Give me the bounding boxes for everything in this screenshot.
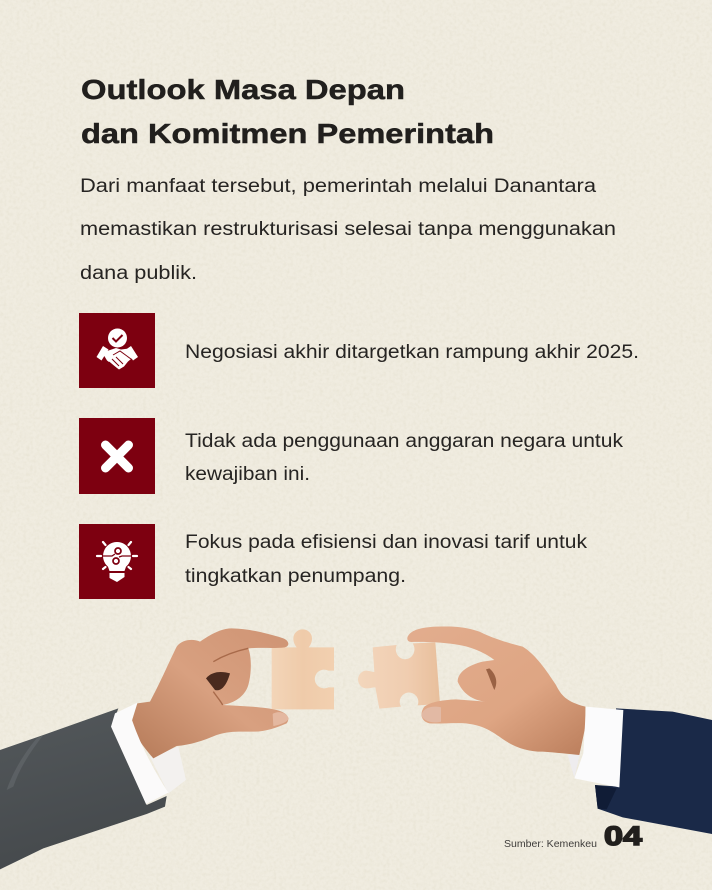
- title: dan Komitmen Pemerintah: [81, 118, 494, 149]
- white cuff: [111, 703, 168, 804]
- item text: efficiency focus: [185, 532, 588, 587]
- navy sleeve: [595, 708, 712, 834]
- title: [81, 74, 494, 149]
- intro paragraph: Dari manfaat tersebut, pemerintah melalui Danantara: [80, 176, 596, 197]
- hand: [407, 626, 585, 755]
- fist shadow: [206, 672, 230, 690]
- icon: cross: [79, 418, 155, 494]
- icon: handshake with check: [79, 313, 155, 388]
- thumb nail: [273, 712, 289, 726]
- puzzle piece left: [272, 629, 334, 709]
- left arm holding puzzle piece: [0, 628, 334, 869]
- hand: [132, 628, 288, 758]
- finger shadow: [486, 668, 496, 690]
- page number: 04: [604, 821, 642, 851]
- inner cuff: [568, 754, 580, 777]
- grey sleeve: [0, 708, 167, 869]
- source note: Sumber: Kemenkeu: [504, 838, 597, 850]
- item text: no state budget: [185, 431, 624, 485]
- item text: efficiency focus: Fokus pada efisiensi dan inovasi tarif untuk: [185, 532, 588, 553]
- item text: no state budget: Tidak ada penggunaan anggaran negara untuk: [185, 431, 624, 452]
- puzzle piece right: [358, 642, 440, 709]
- intro paragraph: dana publik.: [80, 263, 197, 284]
- item text: no state budget: kewajiban ini.: [185, 464, 310, 485]
- title: Outlook Masa Depan: [81, 74, 405, 105]
- thumb nail: [421, 707, 441, 722]
- item text: efficiency focus: tingkatkan penumpang.: [185, 566, 406, 587]
- sleeve fold: [595, 785, 617, 809]
- icon: light bulb: [79, 524, 155, 599]
- right arm holding puzzle piece: [358, 626, 712, 834]
- sleeve highlight: [7, 735, 43, 790]
- item text: negotiation target: Negosiasi akhir ditargetkan rampung akhir 2025.: [185, 342, 639, 363]
- intro paragraph: [80, 176, 616, 284]
- white cuff: [574, 707, 623, 787]
- intro paragraph: memastikan restrukturisasi selesai tanpa menggunakan: [80, 219, 616, 240]
- inner cuff: [150, 747, 186, 793]
